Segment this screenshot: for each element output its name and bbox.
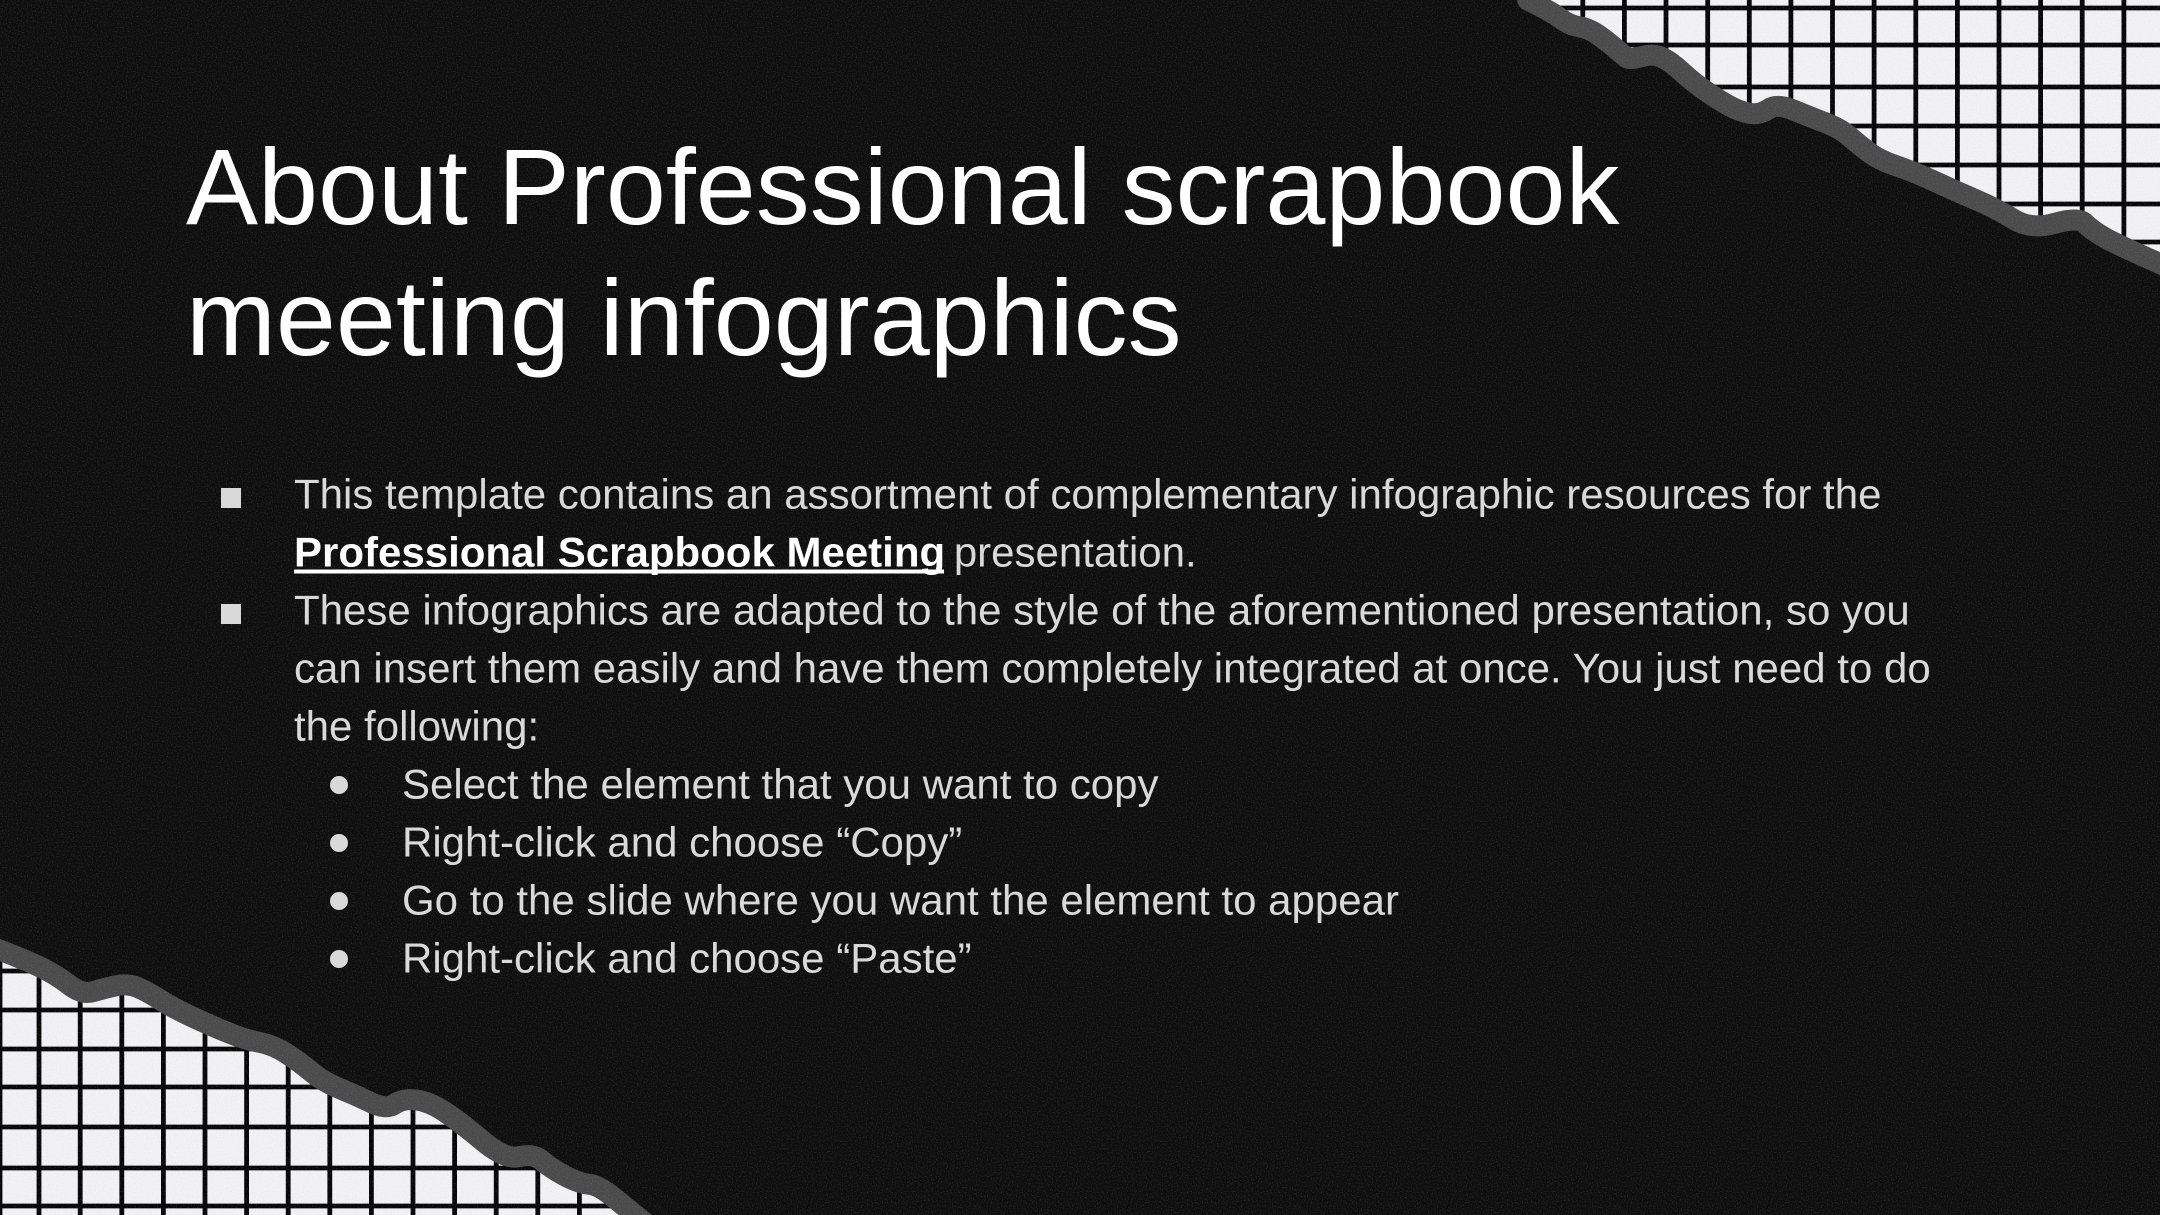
torn paper: bottom left grid [0, 940, 650, 1215]
bullet 1 [221, 470, 1881, 576]
title: About Professional scrapbook [186, 126, 1620, 247]
sub-bullet: select: Select the element that you want to copy [402, 760, 1158, 808]
bullet 1: This template contains an assortment of complementary infographic resources for the [294, 470, 1881, 518]
bullet 2: can insert them easily and have them completely integrated at once. You just need to do [294, 644, 1931, 692]
bullet list [221, 470, 1931, 982]
title [186, 126, 1620, 378]
bullet 2: These infographics are adapted to the style of the aforementioned presentation, so you [294, 586, 1910, 634]
torn paper: top right grid [1520, 0, 2160, 270]
bullet 2: the following: [294, 702, 539, 750]
sub-bullet: copy: Right-click and choose “Copy” [402, 818, 962, 866]
sub-bullet: paste: Right-click and choose “Paste” [402, 934, 972, 982]
bullet 1: Professional Scrapbook Meeting presentation. [294, 528, 1197, 576]
title: meeting infographics [186, 257, 1182, 378]
bullet 2 [221, 586, 1931, 750]
sub-bullet: go to slide: Go to the slide where you want the element to appear [402, 876, 1399, 924]
